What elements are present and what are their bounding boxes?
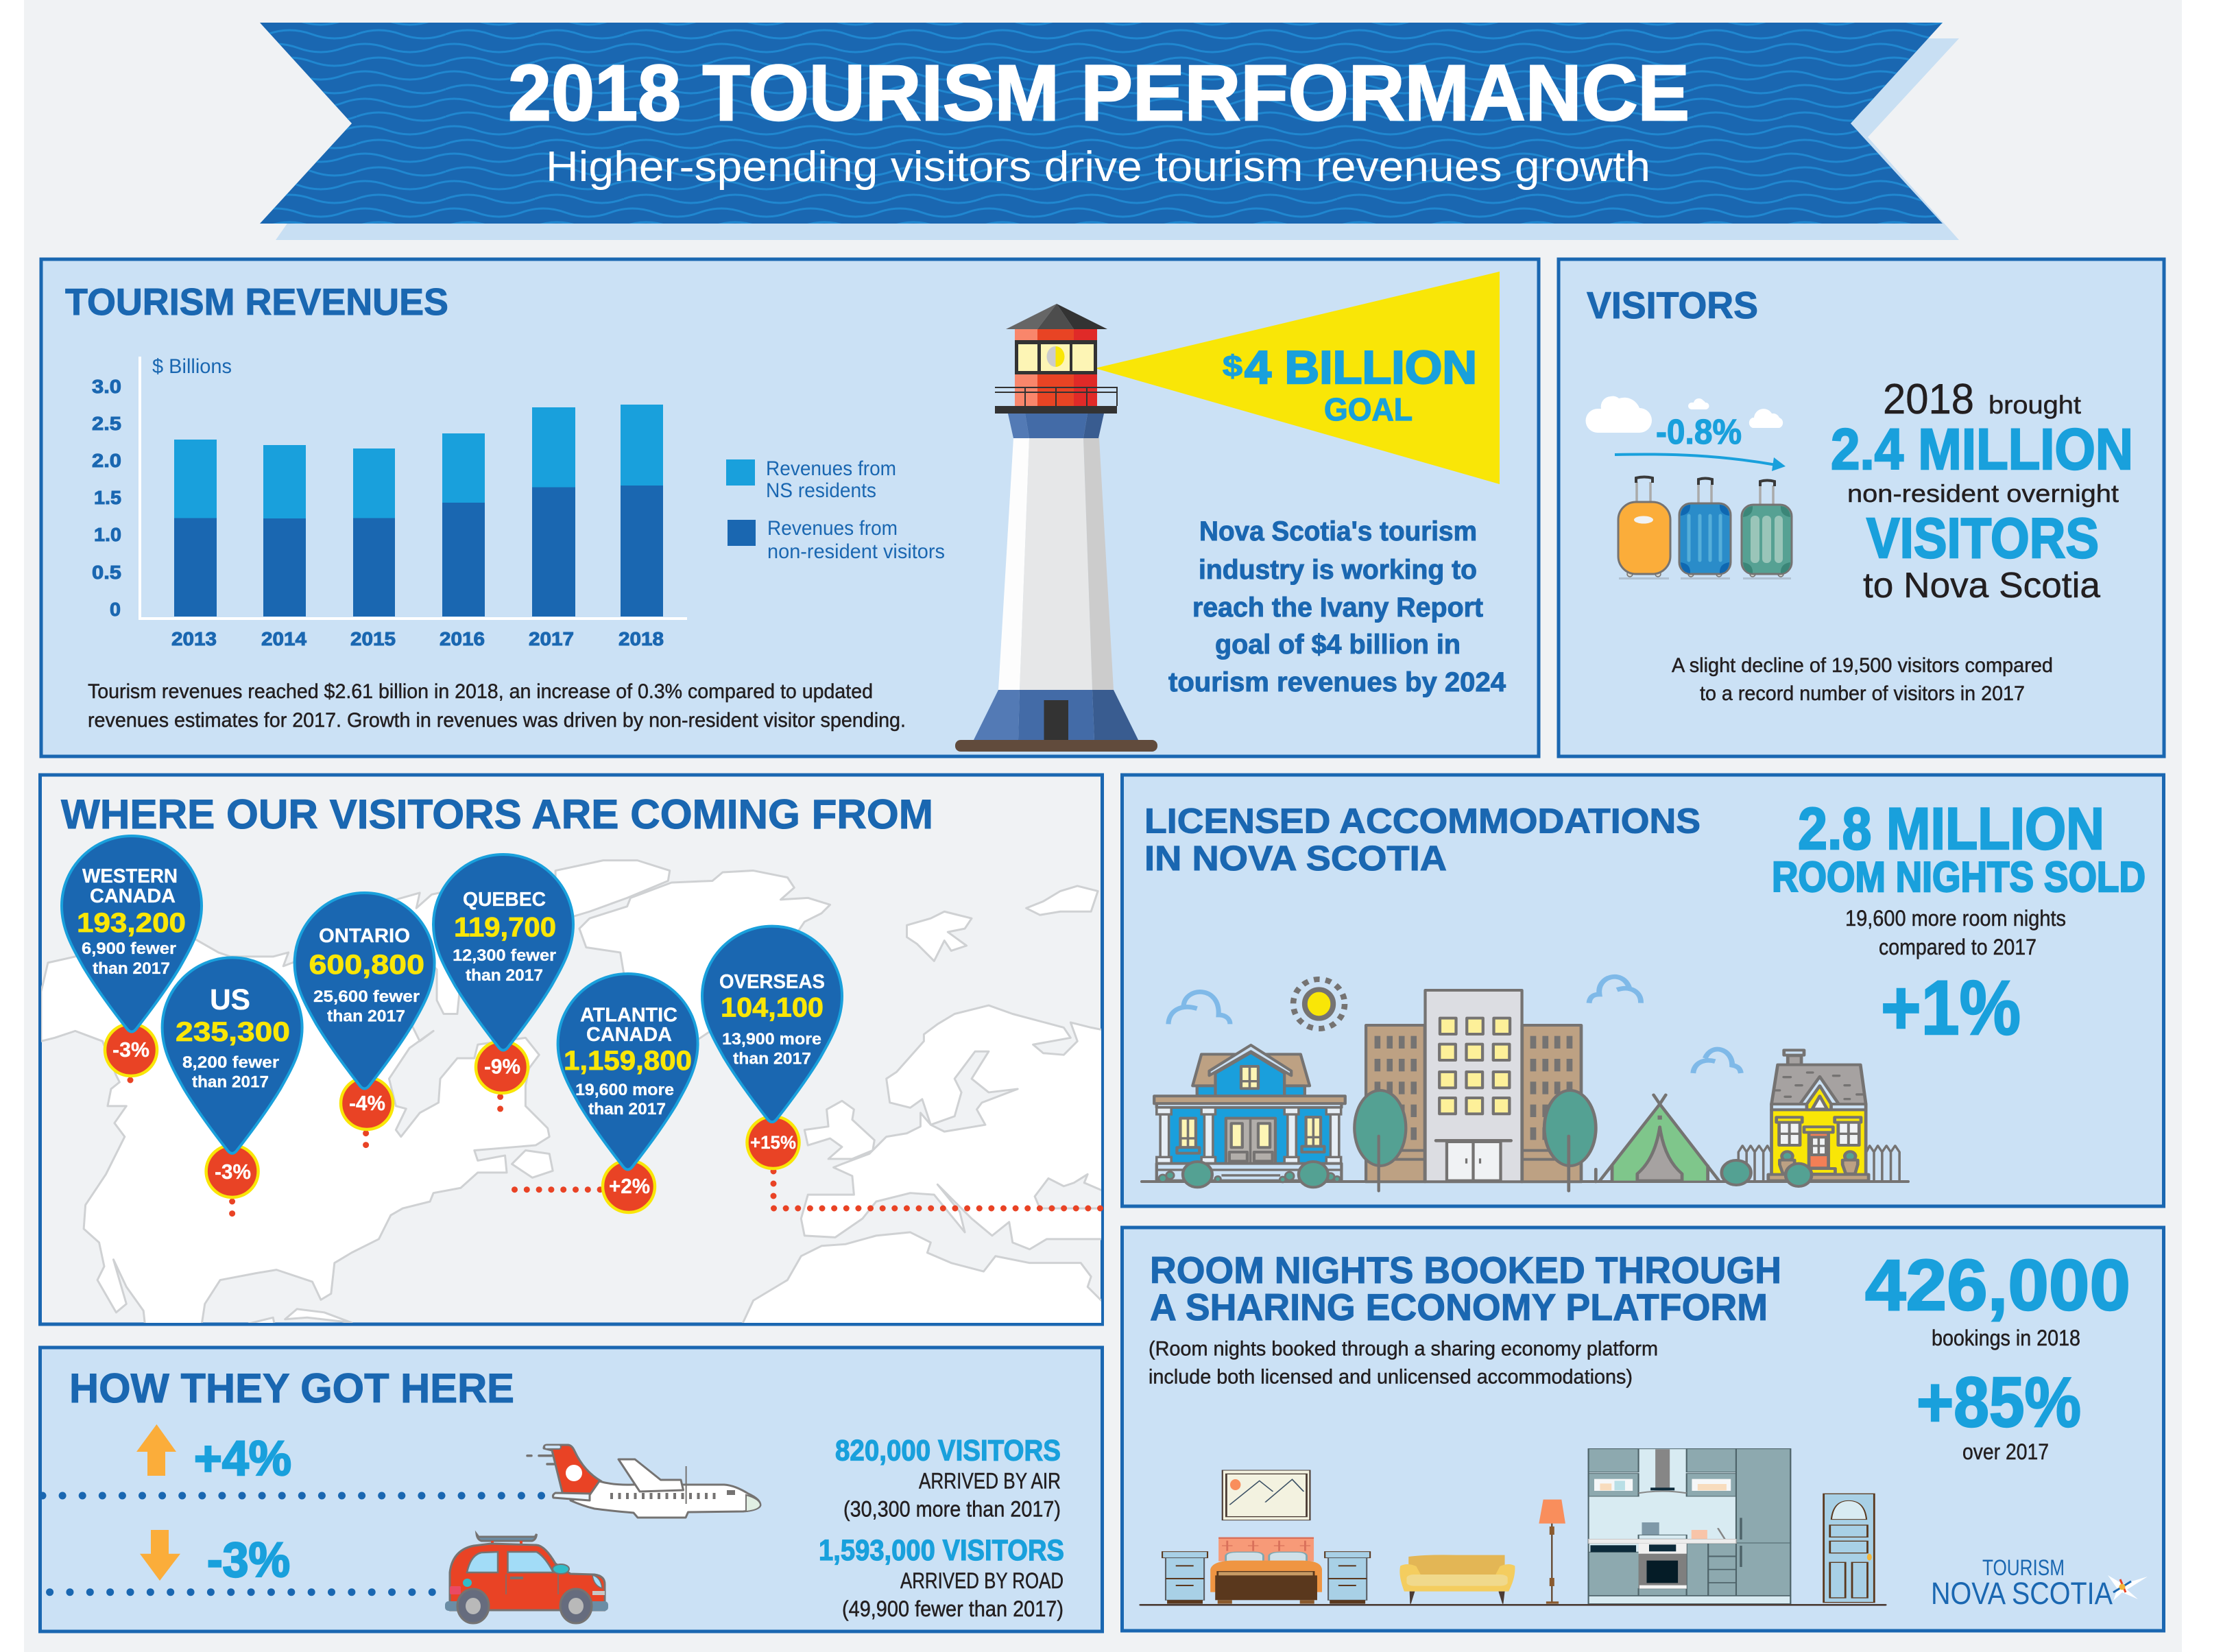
- road change: -3%: [207, 1533, 290, 1588]
- title: 2018 TOURISM PERFORMANCE: [508, 49, 1690, 137]
- goal paragraph: Nova Scotia's tourism: [1199, 516, 1477, 547]
- arrow: decline: [1615, 454, 1786, 471]
- illustration: bedroom, sofa, lamp, kitchen, door: [1139, 1449, 1887, 1606]
- badge: us change: [206, 1145, 259, 1197]
- pin: us: 235,300: [176, 1017, 290, 1047]
- bar chart: revenues by year: 3.0: [92, 376, 121, 397]
- bar chart: revenues by year: 2014: [261, 628, 307, 649]
- banner ribbon: [260, 23, 1943, 224]
- panel: tourism revenues: [41, 259, 1539, 756]
- pin: atlantic canada: 19,600 more: [575, 1081, 674, 1099]
- badge: quebec change: [476, 1041, 528, 1093]
- pin: atlantic canada: than 2017: [588, 1100, 666, 1118]
- badge: atlantic canada change: +2%: [609, 1174, 650, 1198]
- badge: ontario change: [341, 1077, 393, 1129]
- logo: tourism nova scotia: NOVA SCOTIA: [1931, 1576, 2113, 1611]
- visitors headline numbers: 2018: [1883, 376, 1974, 423]
- air change: +4%: [194, 1432, 291, 1486]
- heading: how they got here: HOW THEY GOT HERE: [69, 1365, 514, 1411]
- pin: us: 8,200 fewer: [182, 1053, 279, 1072]
- bar chart: revenues by year: 2013: [171, 628, 217, 649]
- illustration: tent and yellow house: [1522, 977, 1899, 1191]
- legend: non-resident visitors: [767, 540, 945, 563]
- bookings stats: [1865, 1245, 2130, 1464]
- pin: overseas: 13,900 more: [722, 1030, 821, 1049]
- heading: licensed accommodations: LICENSED ACCOMMODATIONS: [1144, 801, 1701, 841]
- route dots: [130, 1080, 1101, 1214]
- pin: ontario: ONTARIO: [319, 925, 410, 947]
- legend: Revenues from: [766, 457, 896, 480]
- pin: western canada: CANADA: [90, 885, 176, 907]
- visitors headline numbers: VISITORS: [1866, 506, 2099, 570]
- pin: western canada: [62, 836, 202, 1031]
- heading: visitors: VISITORS: [1587, 284, 1758, 326]
- bar chart: revenues by year: 0.5: [92, 562, 121, 583]
- revenues summary text: Tourism revenues reached $2.61 billion in 2018, an increase of 0.3% compared to updated: [88, 680, 873, 703]
- badge: overseas change: [747, 1116, 800, 1169]
- heading: tourism revenues: TOURISM REVENUES: [65, 280, 448, 323]
- pin: overseas: OVERSEAS: [719, 971, 825, 993]
- icon: blue suitcase: [1679, 479, 1731, 579]
- icon: orange suitcase: [1618, 477, 1670, 579]
- room nights stats: [1772, 796, 2146, 1051]
- bookings stats: 426,000: [1865, 1245, 2130, 1326]
- icon: clouds: [1585, 396, 1783, 433]
- banner shadow ribbon: [276, 38, 1959, 240]
- visitors headline numbers: brought: [1988, 391, 2082, 419]
- heading: licensed accommodations: IN NOVA SCOTIA: [1144, 839, 1447, 878]
- legend: Revenues from: [767, 517, 898, 540]
- goal paragraph: goal of $4 billion in: [1215, 630, 1461, 660]
- legend: [726, 457, 945, 563]
- icon: lighthouse: [955, 304, 1157, 752]
- badge: quebec change: -9%: [484, 1055, 520, 1079]
- air route dots: [43, 1492, 545, 1499]
- bookings stats: over 2017: [1962, 1439, 2049, 1464]
- goal paragraph: tourism revenues by 2024: [1168, 667, 1506, 697]
- air arrivals text: (30,300 more than 2017): [843, 1497, 1061, 1522]
- bar chart: revenues by year: 2.5: [92, 413, 121, 434]
- sharing economy note: [1149, 1337, 1658, 1389]
- room nights stats: 2.8 MILLION: [1798, 796, 2104, 862]
- pin: ontario: 25,600 fewer: [313, 987, 420, 1006]
- badge: us change: -3%: [215, 1160, 251, 1184]
- pin: us: US: [210, 983, 250, 1016]
- room nights stats: +1%: [1881, 965, 2021, 1051]
- badge: ontario change: -4%: [349, 1091, 385, 1115]
- bar chart: revenues by year: 2.0: [92, 450, 121, 471]
- bookings stats: bookings in 2018: [1932, 1326, 2080, 1350]
- bar chart: revenues by year: 1.5: [94, 487, 121, 508]
- pin: us: [163, 957, 302, 1153]
- icon: car: [445, 1534, 608, 1623]
- pin: western canada: than 2017: [93, 959, 170, 978]
- bar chart: revenues by year: 0: [110, 599, 121, 620]
- legend: NS residents: [766, 479, 876, 502]
- icon: airplane: [527, 1445, 760, 1518]
- pin: overseas: 104,100: [721, 993, 824, 1023]
- bar chart: revenues by year: 2017: [529, 628, 574, 649]
- road arrivals text: [819, 1534, 1064, 1621]
- arrow: up: [136, 1424, 176, 1476]
- pin: atlantic canada: CANADA: [586, 1024, 672, 1046]
- pin: overseas: than 2017: [733, 1050, 811, 1068]
- heading: sharing economy: A SHARING ECONOMY PLATFORM: [1150, 1286, 1768, 1328]
- room nights stats: compared to 2017: [1879, 935, 2036, 959]
- panel: licensed accommodations: [1122, 775, 2164, 1206]
- pin: quebec: 119,700: [454, 913, 556, 943]
- heading: sharing economy: ROOM NIGHTS BOOKED THROUGH: [1150, 1249, 1781, 1291]
- air arrivals text: ARRIVED BY AIR: [919, 1469, 1061, 1494]
- pin: ontario: 600,800: [309, 950, 424, 980]
- road arrivals text: 1,593,000 VISITORS: [819, 1534, 1064, 1567]
- badge: western canada change: [105, 1024, 157, 1076]
- illustration: ground line: [1140, 1180, 1910, 1183]
- room nights stats: 19,600 more room nights: [1845, 906, 2066, 931]
- visitors headline numbers: non-resident overnight: [1847, 479, 2119, 507]
- bar chart: revenues by year: 2015: [350, 628, 396, 649]
- pin: quebec: than 2017: [466, 966, 543, 985]
- pin: overseas: [702, 926, 842, 1122]
- visitors note: [1672, 654, 2053, 705]
- pin: quebec: 12,300 fewer: [453, 946, 556, 965]
- road route dots: [50, 1588, 435, 1596]
- goal paragraph: [1168, 516, 1506, 697]
- air arrivals text: [835, 1435, 1061, 1522]
- road arrivals text: ARRIVED BY ROAD: [900, 1568, 1064, 1593]
- pin: ontario: [295, 893, 435, 1089]
- visitors change: -0.8%: [1656, 412, 1742, 451]
- map: north america and europe: [41, 861, 1108, 1326]
- sharing economy note: (Room nights booked through a sharing economy platform: [1149, 1337, 1658, 1361]
- heading: where our visitors are coming from: WHERE OUR VISITORS ARE COMING FROM: [61, 791, 933, 837]
- road arrivals text: (49,900 fewer than 2017): [842, 1596, 1064, 1621]
- badge: atlantic canada change: [603, 1160, 655, 1212]
- goal callout: [1223, 342, 1477, 427]
- visitors headline numbers: [1831, 376, 2133, 606]
- visitors headline numbers: to Nova Scotia: [1863, 566, 2100, 606]
- pin: western canada: 193,200: [77, 908, 186, 938]
- pin: ontario: than 2017: [327, 1007, 405, 1026]
- bar chart: revenues by year: 1.0: [94, 524, 121, 545]
- bar chart: revenues by year: [92, 355, 687, 649]
- sharing economy note: include both licensed and unlicensed accommodations): [1149, 1366, 1633, 1389]
- pin: western canada: 6,900 fewer: [82, 939, 176, 958]
- logo: tourism nova scotia: TOURISM: [1982, 1555, 2065, 1580]
- visitors note: to a record number of visitors in 2017: [1700, 682, 2025, 705]
- revenues summary text: [88, 680, 906, 732]
- pin: quebec: QUEBEC: [463, 889, 546, 911]
- subtitle: Higher-spending visitors drive tourism revenues growth: [546, 143, 1650, 191]
- arrow: down: [140, 1530, 180, 1581]
- panel: visitors: [1559, 259, 2164, 756]
- revenues summary text: revenues estimates for 2017. Growth in revenues was driven by non-resident visitor spending.: [88, 709, 906, 732]
- goal callout: 4 BILLION: [1245, 342, 1477, 394]
- badge: overseas change: +15%: [750, 1132, 796, 1153]
- pin: western canada: WESTERN: [82, 865, 178, 887]
- pin: atlantic canada: ATLANTIC: [580, 1004, 677, 1026]
- panel: how they got here: [40, 1348, 1103, 1631]
- logo: tourism nova scotia: [1931, 1555, 2148, 1611]
- visitors note: A slight decline of 19,500 visitors compared: [1672, 654, 2053, 677]
- air arrivals text: 820,000 VISITORS: [835, 1435, 1061, 1468]
- panel: where our visitors are coming from: [40, 775, 1108, 1326]
- bar chart: revenues by year: 2016: [440, 628, 485, 649]
- illustration: blue house, sun and hotel: [1154, 979, 1522, 1191]
- badge: western canada change: -3%: [112, 1038, 149, 1062]
- pin: atlantic canada: [558, 974, 698, 1170]
- goal paragraph: reach the Ivany Report: [1192, 592, 1483, 623]
- visitors headline numbers: 2.4 MILLION: [1831, 417, 2133, 481]
- bar chart: revenues by year: $ Billions: [152, 355, 232, 378]
- banner: [260, 23, 1959, 240]
- yellow light beam: [1095, 272, 1500, 484]
- goal callout: GOAL: [1324, 392, 1413, 427]
- bar chart: revenues by year: 2018: [618, 628, 664, 649]
- goal callout: $: [1223, 350, 1242, 383]
- panel: sharing economy room nights: [1122, 1228, 2164, 1631]
- icon: green suitcase: [1742, 480, 1792, 579]
- pin: atlantic canada: 1,159,800: [564, 1046, 692, 1076]
- room nights stats: ROOM NIGHTS SOLD: [1772, 854, 2146, 901]
- heading: licensed accommodations: [1144, 801, 1701, 878]
- pin: us: than 2017: [192, 1073, 269, 1092]
- goal paragraph: industry is working to: [1199, 555, 1477, 585]
- pin: quebec: [433, 854, 573, 1051]
- bookings stats: +85%: [1916, 1363, 2081, 1441]
- heading: sharing economy: [1150, 1249, 1781, 1328]
